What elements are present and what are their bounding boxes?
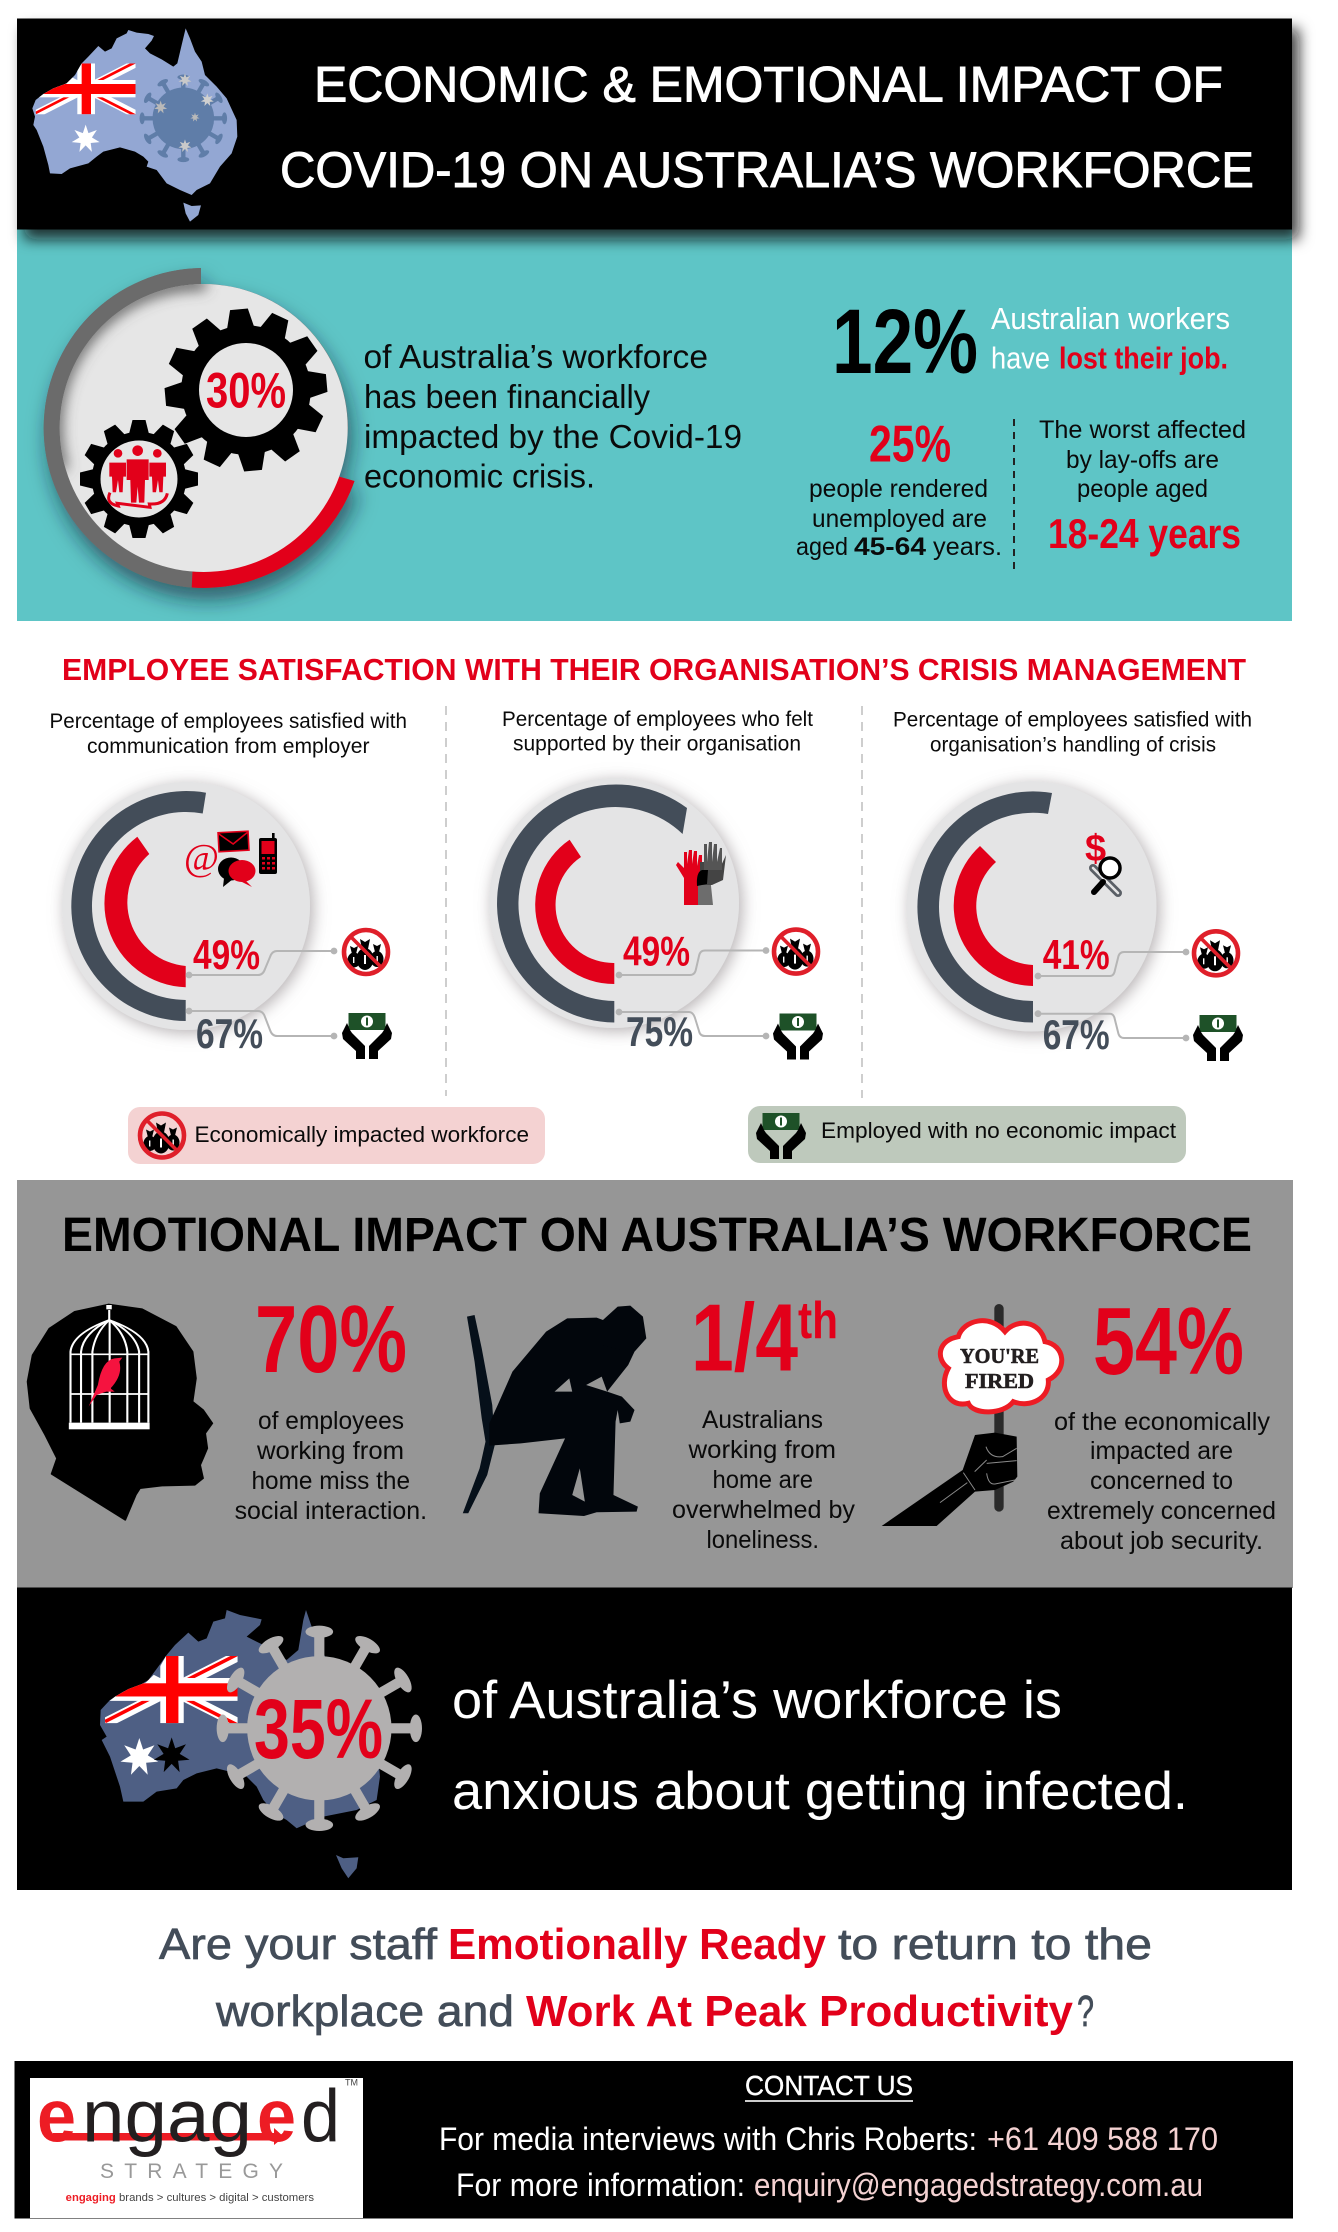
icon: no money [344, 930, 388, 974]
text: anxious about getting infected: of Australia’s workforce is [452, 1671, 1062, 1730]
callout: emotionally ready question: ? [1077, 1987, 1094, 2036]
stat: 1/4th: th [798, 1292, 838, 1350]
icon: small gear with people [80, 420, 198, 538]
stat: 67%: 67% [196, 1010, 263, 1057]
text: column heading: Percentage of employees satisfied with [50, 709, 407, 733]
text: financially impacted: has been financially [364, 378, 650, 415]
text: column heading: communication from employer [87, 734, 370, 758]
icon: no money [774, 930, 818, 974]
stat: 25% aged 45-64: 25% [869, 416, 951, 474]
text: overwhelmed by loneliness [672, 1406, 856, 1554]
text: overwhelmed by loneliness: working from [687, 1436, 836, 1464]
callout: emotionally ready question: Are your staff [159, 1920, 438, 1969]
text: job security: impacted are [1090, 1437, 1233, 1465]
panel: contact footer [14, 2061, 1293, 2218]
heading: employee satisfaction: EMPLOYEE SATISFACTION WITH THEIR ORGANISATION’S CRISIS MANAGEMENT [62, 652, 1246, 687]
callout: emotionally ready question [159, 1920, 1152, 2036]
heading: contact us: CONTACT US [745, 2070, 913, 2101]
text: job security [1047, 1408, 1276, 1555]
text: media contact: For media interviews with Chris Roberts: [439, 2121, 977, 2157]
chart: supported by organisation [489, 707, 823, 1060]
callout: emotionally ready question: to return to the [838, 1920, 1152, 1969]
text: email contact: enquiry@engagedstrategy.com.au [754, 2167, 1203, 2203]
icon: large gear [158, 302, 334, 478]
icon: communication: @ [184, 837, 219, 879]
heading: emotional impact: EMOTIONAL IMPACT ON AUSTRALIA’S WORKFORCE [62, 1209, 1252, 1262]
stat: worst affected 18-24: people aged [1077, 475, 1208, 503]
text: miss social interaction: home miss the [252, 1467, 410, 1495]
stat: 49%: 49% [193, 931, 260, 978]
stat: 35%: 35% [254, 1682, 383, 1776]
text: column heading: Percentage of employees satisfied with [893, 708, 1252, 732]
title: ECONOMIC & EMOTIONAL IMPACT OF [314, 56, 1223, 112]
legend: economically impacted [128, 1107, 545, 1164]
stat: 49%: 49% [623, 928, 690, 975]
legend: economically impacted: Economically impacted workforce [194, 1122, 529, 1147]
icon: fist holding you're fired sign: FIRED [965, 1369, 1034, 1393]
donut: 30% of workforce [44, 268, 354, 588]
icon: Australia map with flag and virus [100, 1610, 422, 1878]
stat: 67%: 67% [1043, 1011, 1110, 1058]
icon: Australia map with flag and virus [32, 28, 237, 222]
title [280, 56, 1254, 198]
stat: worst affected 18-24 [1039, 416, 1246, 557]
text: lost their job [991, 301, 1230, 376]
logo: engaged strategy: d [301, 2075, 340, 2158]
icon: hands holding money [773, 1014, 823, 1060]
title: COVID-19 ON AUSTRALIA’S WORKFORCE [280, 142, 1254, 198]
text: anxious about getting infected: anxious about getting infected. [452, 1762, 1188, 1821]
text: column heading: organisation’s handling of crisis [930, 733, 1216, 757]
stat: 1/4th: 1/4 [691, 1285, 798, 1392]
text: job security: extremely concerned [1047, 1497, 1276, 1525]
icon: dollar and magnifier [1085, 828, 1120, 893]
text: overwhelmed by loneliness: home are [712, 1466, 813, 1494]
connector: impacted [1036, 950, 1188, 978]
icon: person slumped on chair [463, 1306, 646, 1516]
logo: engaged strategy: STRATEGY [100, 2160, 283, 2183]
icon: dollar and magnifier: $ [1085, 828, 1106, 870]
text: overwhelmed by loneliness: loneliness. [706, 1526, 819, 1554]
stat: worst affected 18-24: 18-24 years [1048, 510, 1241, 557]
text: job security: of the economically [1054, 1408, 1270, 1436]
text: overwhelmed by loneliness: overwhelmed by [672, 1496, 856, 1524]
connector: not impacted [187, 1009, 336, 1038]
callout: emotionally ready question: Work At Peak Productivity [526, 1987, 1074, 2036]
text: job security: about job security. [1060, 1527, 1263, 1555]
text: financially impacted [364, 338, 742, 494]
stat: 70%: 70% [255, 1286, 407, 1393]
stat: 41%: 41% [1043, 931, 1110, 978]
stat: 30%: 30% [206, 363, 286, 419]
connector: impacted [617, 948, 768, 977]
callout: emotionally ready question: workplace and [215, 1987, 514, 2036]
logo: engaged strategy: TM [345, 2078, 358, 2088]
stat: 25% aged 45-64 [796, 416, 1002, 561]
icon: hands holding money [1193, 1015, 1243, 1061]
stat: 25% aged 45-64: years. [933, 533, 1002, 561]
text: financially impacted: economic crisis. [364, 458, 595, 494]
icon: fist holding you're fired sign: YOU'RE [960, 1344, 1039, 1368]
text: column heading [893, 708, 1252, 757]
chart: communication from employer [50, 709, 407, 1059]
icon: raised hands [676, 842, 726, 905]
text: overwhelmed by loneliness: Australians [702, 1406, 823, 1434]
stat: 25% aged 45-64: people rendered [809, 475, 988, 503]
text: job security: concerned to [1090, 1467, 1233, 1495]
stat: 12%: 12% [832, 291, 978, 393]
logo: engaged strategy: engaging [66, 2192, 116, 2204]
text: financially impacted: of Australia’s workforce [364, 338, 708, 375]
icon: fist holding you're fired sign [882, 1304, 1062, 1526]
text: anxious about getting infected [452, 1671, 1188, 1821]
panel: title banner [17, 18, 1292, 230]
text: financially impacted: impacted by the Covid-19 [364, 418, 742, 455]
callout: emotionally ready question: Emotionally Ready [448, 1920, 826, 1969]
icon: no money [1194, 931, 1238, 975]
chart: handling of crisis [893, 708, 1252, 1061]
logo: engaged strategy: brands > cultures > digital > customers [119, 2192, 315, 2204]
logo: engaged strategy: e [37, 2075, 76, 2158]
connector: not impacted [1036, 1011, 1188, 1040]
logo: engaged strategy [30, 2075, 363, 2218]
stat: worst affected 18-24: by lay-offs are [1066, 446, 1219, 474]
text: email contact [456, 2167, 1203, 2203]
legend: no economic impact: Employed with no economic impact [821, 1118, 1177, 1143]
text: media contact: +61 409 588 170 [987, 2121, 1218, 2157]
text: miss social interaction: social interaction. [235, 1497, 427, 1525]
stat: worst affected 18-24: The worst affected [1039, 416, 1246, 444]
text: miss social interaction [235, 1407, 427, 1525]
connector: impacted [187, 949, 336, 977]
text: email contact: For more information: [456, 2167, 745, 2203]
stat: 25% aged 45-64: 45-64 [854, 533, 926, 561]
text: column heading: supported by their organisation [513, 732, 801, 756]
logo: engaged strategy: e [257, 2075, 296, 2158]
text: column heading [50, 709, 407, 758]
text: lost their job: lost their job. [1059, 341, 1228, 376]
stat: 75%: 75% [626, 1008, 693, 1055]
text: miss social interaction: of employees [258, 1407, 404, 1435]
stat: 25% aged 45-64: unemployed are [812, 505, 987, 533]
panel: employee satisfaction [50, 652, 1252, 1164]
icon: hands holding money [342, 1013, 392, 1059]
stat: 25% aged 45-64: aged [796, 533, 848, 561]
panel: anxious about infection [17, 1588, 1292, 1890]
text: column heading: Percentage of employees who felt [502, 707, 813, 731]
connector: not impacted [617, 1010, 768, 1038]
stat: 54%: 54% [1093, 1288, 1244, 1395]
icon: communication [184, 831, 277, 887]
panel: emotional impact [17, 1180, 1293, 1588]
text: lost their job: Australian workers [991, 301, 1230, 336]
legend: no economic impact [748, 1106, 1186, 1163]
text: lost their job: have [991, 341, 1050, 376]
text: miss social interaction: working from [256, 1437, 404, 1465]
logo: engaged strategy: ngag [82, 2075, 252, 2158]
panel: teal economic impact [17, 229, 1292, 621]
text: column heading [502, 707, 813, 756]
icon: head with caged bird [28, 1304, 212, 1520]
